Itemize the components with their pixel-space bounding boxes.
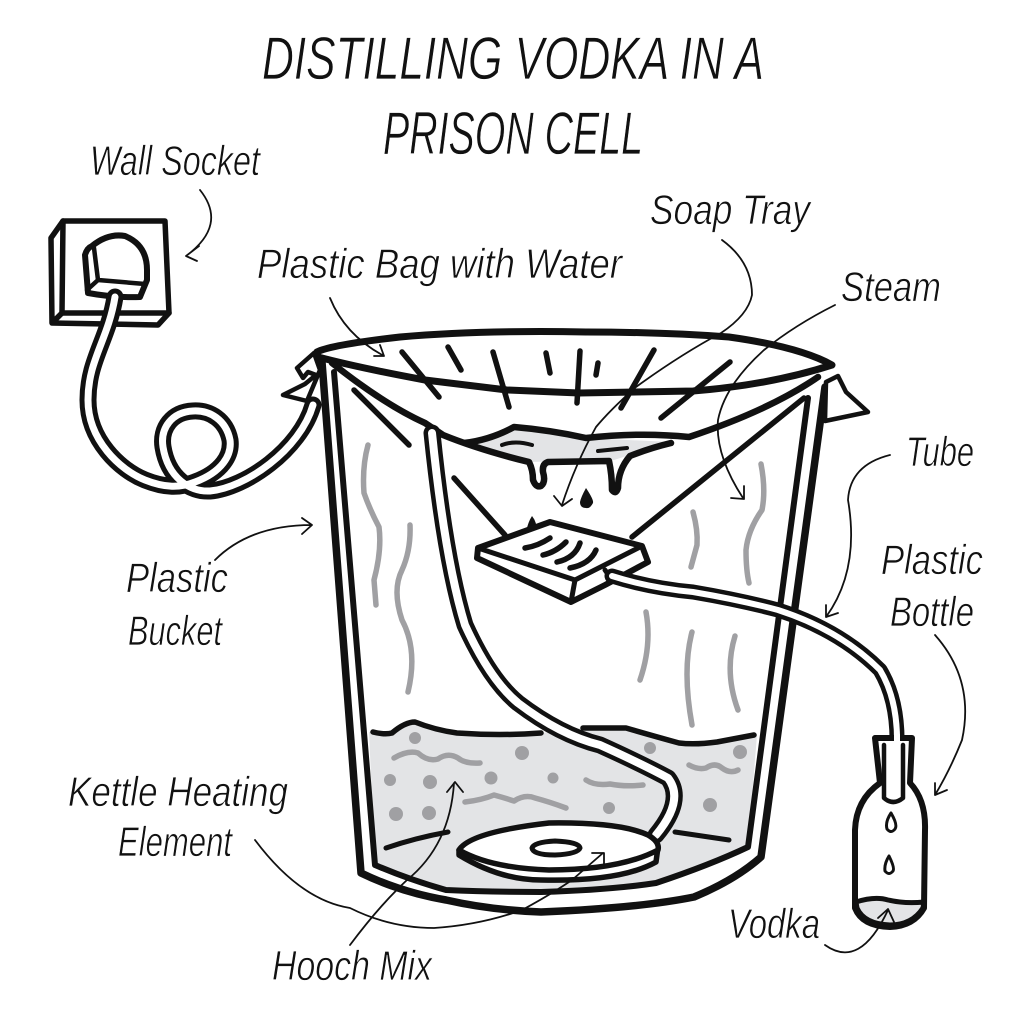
bucket handles [283, 353, 320, 401]
labels: Element [118, 818, 234, 865]
labels: Plastic Bag with Water [257, 240, 624, 287]
labels: Kettle Heating [68, 768, 288, 815]
soap tray [477, 522, 648, 602]
labels: Vodka [728, 900, 820, 947]
bubbles and liquid ripples [384, 732, 747, 821]
labels: Tube [906, 428, 974, 475]
title: DISTILLING VODKA IN A [262, 25, 764, 92]
plastic bottle with vodka [855, 735, 925, 927]
arrows [186, 190, 965, 952]
labels: Steam [841, 263, 941, 310]
plastic bucket [283, 353, 868, 912]
icon: wall socket with plug and cable [51, 221, 313, 491]
labels: Plastic [881, 536, 983, 583]
labels: Hooch Mix [272, 942, 434, 989]
labels: Plastic [126, 554, 228, 601]
title: PRISON CELL [383, 100, 643, 167]
plastic bag with water [317, 332, 832, 537]
steam [364, 445, 764, 725]
kettle heating element [432, 433, 674, 880]
labels [68, 137, 983, 989]
panel: hooch mix liquid [369, 722, 757, 892]
title [262, 25, 764, 167]
labels: Soap Tray [650, 186, 813, 233]
labels: Bucket [128, 607, 224, 654]
tube [612, 576, 897, 745]
labels: Wall Socket [90, 137, 262, 184]
labels: Bottle [890, 588, 974, 635]
